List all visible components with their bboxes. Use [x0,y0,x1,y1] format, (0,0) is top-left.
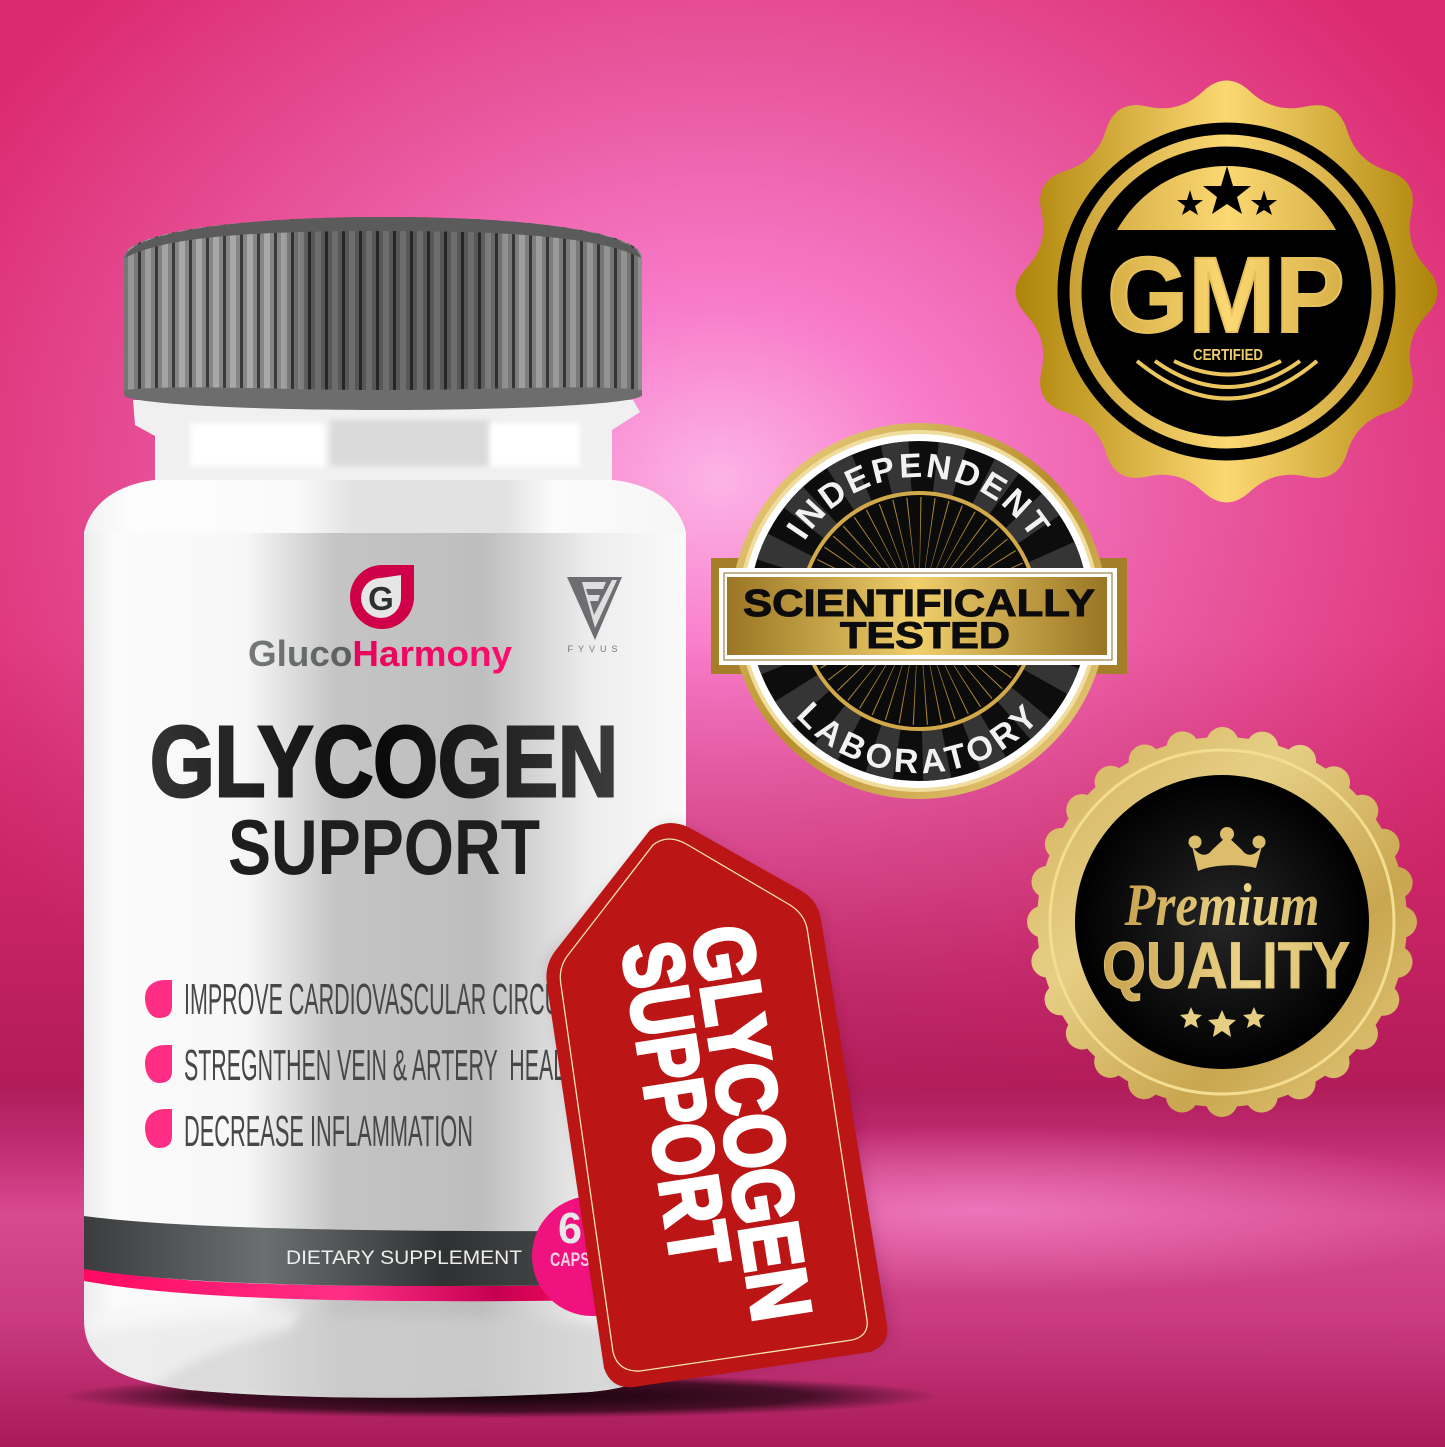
badge: premium quality [1037,737,1407,1107]
GMP scalloped seal [1016,81,1437,502]
title: SUPPORT: SUPPORT [228,803,540,891]
arc text: LABORATORY: LABORATORY [796,701,1034,774]
premium script: Premium [1124,872,1320,938]
logo: FYVUS [567,577,623,654]
benefit 1 [145,975,636,1024]
background: studio floor [0,1090,1445,1447]
premium gold disc [1037,737,1407,1107]
product bottle: STREGNTHEN VEIN & ARTERY HEALTH [184,1041,592,1090]
GMP stars [1177,166,1277,215]
badge: independent laboratory scientifically tested [711,423,1127,799]
banner gold [727,577,1107,655]
ring sunburst wedges [774,466,1064,756]
premium scalloped edge [1043,743,1401,1101]
GMP arcs [1137,361,1317,398]
product bottle [70,217,700,1400]
benefit 2 [145,1041,592,1090]
tag shadow [550,826,888,1388]
seal ring [731,423,1107,799]
tag text: GLYCOGEN: GLYCOGEN [674,919,829,1327]
capsule count badge: CAPSULES [550,1250,628,1271]
GMP text: GMP [1107,234,1345,355]
benefit 3 [145,1107,473,1156]
GMP top dome [1117,166,1336,230]
certified text: CERTIFIED [1193,347,1263,364]
inner disc [801,493,1037,729]
banner back [711,558,1127,674]
capsule count badge: 60 [558,1204,606,1253]
banner frame [719,568,1117,665]
capsule count badge [532,1196,652,1316]
bottle shoulder [84,480,686,533]
text: dietary supplement: DIETARY SUPPLEMENT [286,1248,522,1269]
banner text: TESTED: TESTED [840,615,1010,656]
inner rays [849,541,989,681]
icon: crown [1188,827,1266,871]
product bottle: DECREASE INFLAMMATION [184,1107,473,1156]
dark band [84,1216,600,1286]
arc text: INDEPENDENT: INDEPENDENT [786,453,1051,540]
tag shape [546,823,887,1387]
premium black disc [1075,775,1369,1069]
bottle cap [124,217,642,410]
logo wordmark: GlucoHarmony: GlucoHarmony [248,633,512,674]
bottle body [84,480,686,1398]
title: GLYCOGEN: GLYCOGEN [150,706,618,818]
logo: FYVUS: FYVUS [567,644,623,654]
premium gold ring line [1050,750,1394,1094]
red tag [546,823,888,1388]
bottle ground shadow [60,1374,940,1418]
product bottle: IMPROVE CARDIOVASCULAR CIRCULATION [184,975,636,1024]
bottom base shade [84,1314,624,1398]
logo icon: GlucoHarmony drop: G [368,580,394,617]
bottle neck [133,400,640,480]
logo icon: GlucoHarmony drop [350,565,414,629]
badge: GMP certified [1016,81,1437,502]
banner text: SCIENTIFICALLY: SCIENTIFICALLY [743,583,1095,625]
pink stripe [84,1268,620,1301]
quality text: QUALITY [1102,928,1350,1002]
premium stars [1180,1007,1265,1037]
tag text: SUPPORT: SUPPORT [604,935,748,1272]
tag inner stitching [560,839,867,1371]
